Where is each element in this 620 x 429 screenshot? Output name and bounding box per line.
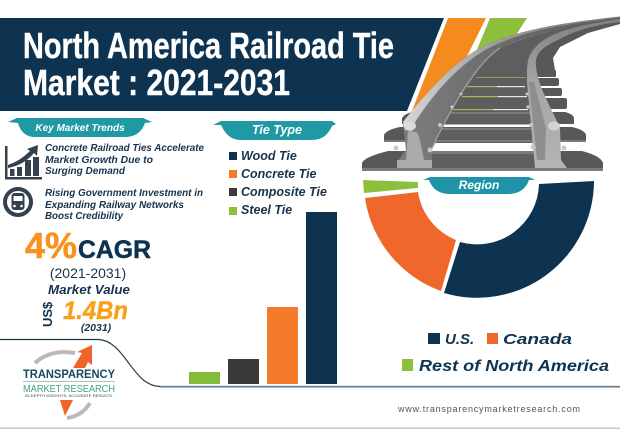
sleepers: [362, 19, 620, 171]
icon: growth chart: [5, 145, 42, 180]
sleeper highlights: [362, 112, 603, 171]
ribbon: Key Market Trends: [8, 118, 152, 137]
icon: train in circle: [5, 189, 31, 215]
left rail: [397, 17, 620, 168]
title: [23, 25, 394, 103]
ribbon: Region: Region: [459, 178, 499, 192]
text: trend 2: Rising Government Investment in: [45, 188, 203, 199]
logo: TRANSPARENCY: [23, 367, 115, 381]
text: trend 2: [45, 188, 203, 222]
currency label: US$: [40, 301, 55, 327]
legend: tie type: Steel Tie: [241, 203, 292, 217]
text: trend 1: [45, 143, 204, 177]
CAGR figure: CAGR: [78, 236, 151, 264]
logo: MARKET RESEARCH: [23, 384, 115, 395]
text: trend 1: Concrete Railroad Ties Accelerate: [45, 143, 204, 154]
market value label: Market Value: [48, 282, 130, 297]
website url: www.transparencymarketresearch.com: [397, 404, 580, 414]
ribbon: Key Market Trends: Key Market Trends: [35, 123, 125, 134]
legend: region: Canada: [503, 331, 572, 348]
title: Market : 2021-2031: [23, 62, 290, 103]
legend: tie type: Wood Tie: [241, 149, 297, 163]
header banner: [0, 18, 444, 111]
ribbon: Region: [423, 177, 535, 194]
logo: [23, 345, 115, 418]
title: North America Railroad Tie: [23, 25, 394, 66]
ribbon: Tie Type: [213, 121, 336, 140]
donut chart: [363, 180, 594, 298]
text: trend 2: Boost Credibility: [45, 211, 124, 222]
header accent: green stripe: [476, 18, 527, 52]
bed between rails: [432, 18, 620, 168]
CAGR figure: [25, 225, 151, 266]
bottom rule: [0, 428, 620, 429]
market value year: (2031): [81, 322, 112, 334]
railroad track illustration: [362, 16, 620, 171]
legend: region: [402, 331, 609, 375]
logo: IN-DEPTH INSIGHTS, ACCURATE RESULTS: [25, 394, 113, 398]
right rail: [527, 19, 620, 168]
text: trend 1: Surging Demand: [45, 166, 126, 177]
gaps between sleepers: [432, 124, 535, 151]
legend: region: U.S.: [445, 331, 474, 348]
legend: tie type: Concrete Tie: [241, 167, 317, 181]
header accent: orange stripe: [412, 18, 486, 111]
CAGR period: (2021-2031): [50, 265, 126, 281]
text: trend 1: Market Growth Due to: [45, 155, 153, 166]
legend: tie type: Composite Tie: [241, 185, 327, 199]
text: trend 2: Expanding Railway Networks: [45, 200, 184, 211]
bar chart: [189, 212, 337, 384]
CAGR figure: 4%: [25, 225, 77, 266]
legend: tie type: [229, 149, 327, 217]
ribbon: Tie Type: Tie Type: [252, 123, 302, 137]
market value figure: 1.4Bn: [63, 297, 128, 325]
legend: region: Rest of North America: [419, 358, 609, 375]
